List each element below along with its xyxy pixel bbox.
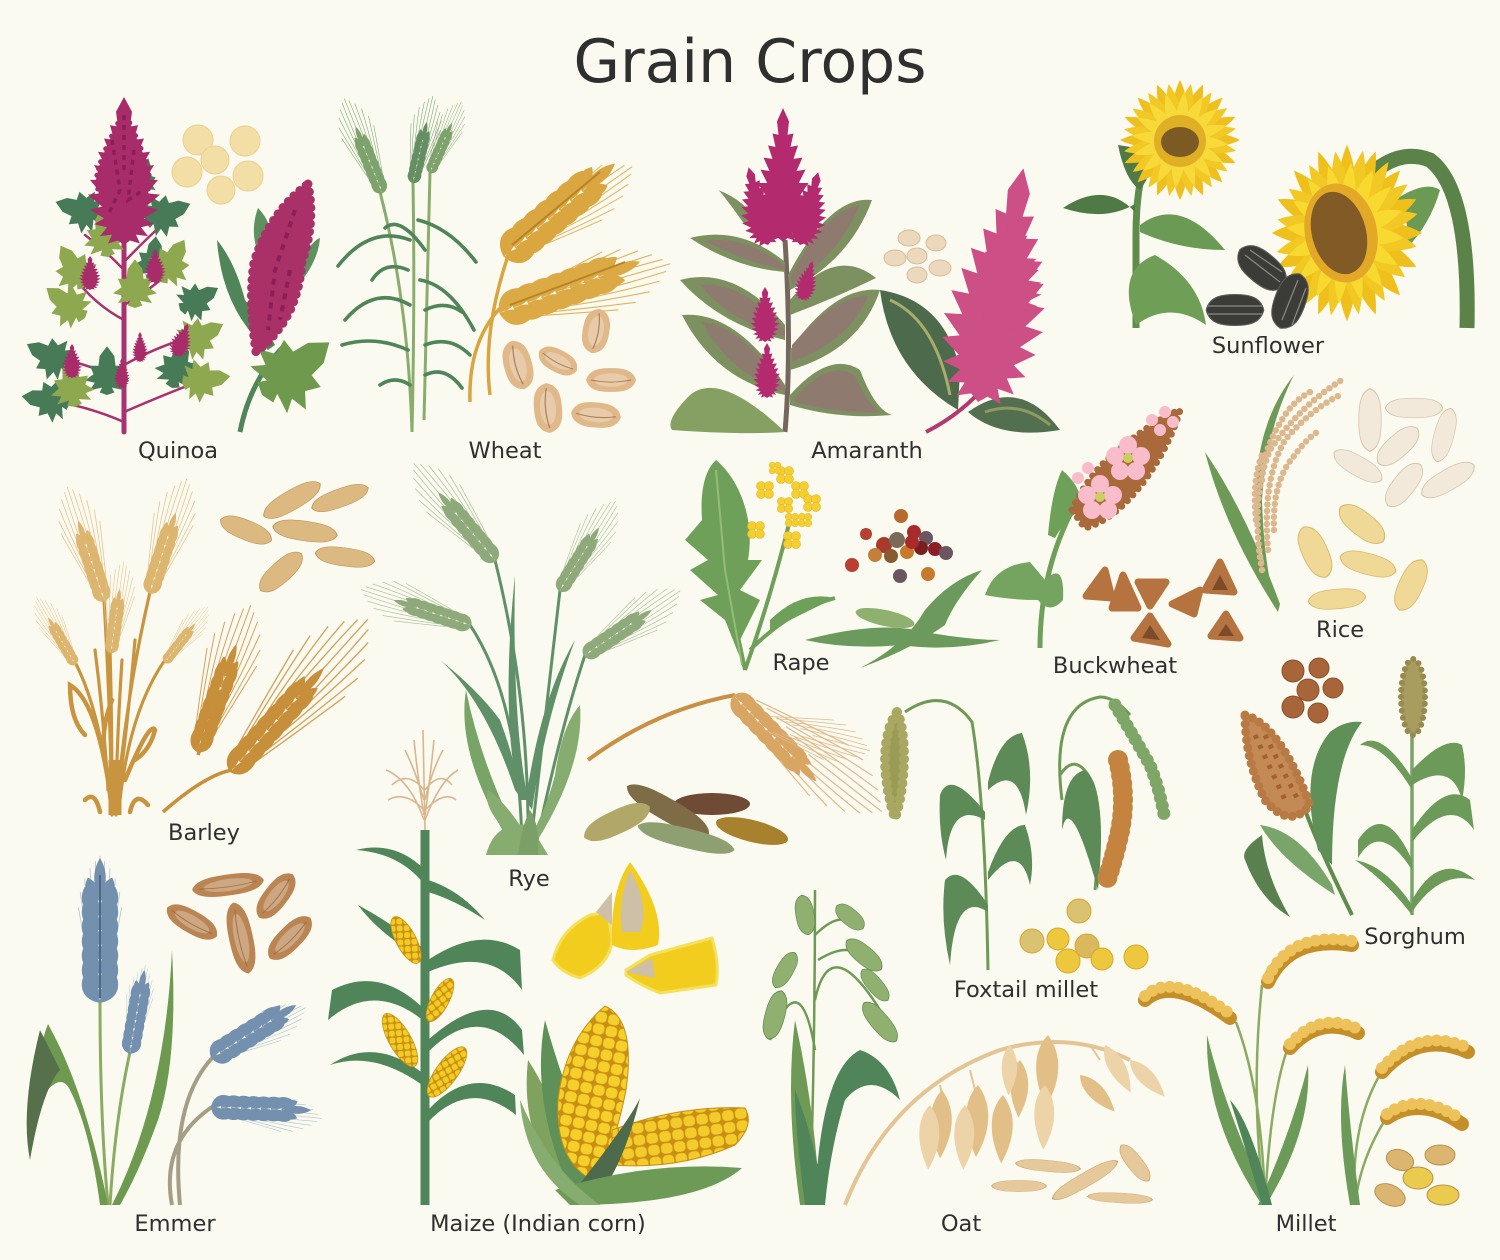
plant: pink amaranth — [880, 159, 1073, 433]
panel: rice — [1205, 375, 1479, 643]
panel: rape — [685, 460, 1000, 676]
plant: rice — [1205, 375, 1345, 612]
seed shading: buckwheat — [1142, 575, 1234, 640]
seeds: rapeseed — [845, 509, 953, 583]
plant: rapeseed — [685, 460, 835, 670]
label: Buckwheat: Buckwheat — [1053, 653, 1177, 679]
seeds: emmer — [162, 867, 319, 976]
plant: buckwheat — [985, 406, 1180, 648]
plant: amaranth with brown leaves — [670, 108, 892, 433]
plant: sunflower upright — [1063, 73, 1247, 328]
ears: barley — [163, 596, 394, 812]
seeds: oat — [992, 1141, 1155, 1205]
seeds: rye — [579, 777, 791, 860]
plant: ripe oat — [845, 1035, 1171, 1205]
panel: barley — [25, 473, 394, 846]
plant: foxtail right — [1060, 697, 1165, 890]
label: Maize (Indian corn): Maize (Indian corn) — [430, 1211, 646, 1237]
panicles: millet — [1145, 939, 1468, 1124]
label: Rye: Rye — [508, 866, 550, 892]
plant: green rye — [355, 450, 691, 855]
panel: wheat — [328, 92, 678, 464]
plant: golden wheat — [470, 145, 678, 402]
label: Quinoa: Quinoa — [138, 438, 218, 464]
plant: sunflower drooping — [1261, 137, 1467, 329]
label: Oat: Oat — [941, 1211, 981, 1237]
seeds: millet — [1371, 1145, 1459, 1211]
panel: rye — [355, 450, 901, 892]
panel: quinoa — [17, 97, 353, 464]
panel: millet — [1145, 939, 1468, 1237]
label: Millet: Millet — [1276, 1211, 1337, 1237]
label: Rice: Rice — [1316, 617, 1364, 643]
plant: quinoa with leaves — [17, 97, 233, 432]
seeds: sorghum — [1282, 658, 1343, 723]
seeds: buckwheat — [1086, 562, 1240, 644]
label: Barley: Barley — [168, 820, 240, 846]
panel: sunflower — [1063, 73, 1467, 359]
label: Wheat: Wheat — [469, 438, 542, 464]
panel: foxtail millet — [885, 697, 1165, 1003]
plant: sorghum tall — [1355, 659, 1475, 915]
plant: sorghum ripe — [1244, 715, 1362, 917]
plant: green wheat — [328, 92, 476, 432]
plant: millet large — [1207, 985, 1308, 1205]
label: Sunflower: Sunflower — [1212, 333, 1325, 359]
plant: emmer green — [27, 856, 173, 1205]
seeds: barley — [217, 475, 376, 598]
label: Rape: Rape — [772, 650, 830, 676]
panel: oat — [759, 890, 1171, 1237]
seeds: foxtail millet — [1020, 899, 1148, 973]
panel: emmer — [27, 856, 323, 1237]
title: Grain Crops — [574, 27, 926, 97]
cob: maize — [520, 1006, 748, 1205]
seeds: maize — [553, 862, 717, 993]
seeds: amaranth — [884, 230, 951, 283]
label: Foxtail millet: Foxtail millet — [954, 977, 1098, 1003]
panel: sorghum — [1244, 658, 1475, 950]
label: Emmer: Emmer — [134, 1211, 216, 1237]
seeds: rice yellow — [1292, 498, 1433, 615]
seeds: wheat — [498, 307, 636, 434]
seeds: sunflower — [1206, 238, 1314, 333]
label: Sorghum: Sorghum — [1364, 924, 1466, 950]
panel: buckwheat — [985, 406, 1240, 679]
plant: foxtail left — [885, 701, 1032, 970]
seeds: rice white — [1329, 389, 1479, 513]
label: Amaranth: Amaranth — [811, 438, 923, 464]
ear: ripe rye — [588, 683, 901, 837]
plant: maize stalk — [328, 730, 524, 1205]
panel: amaranth — [670, 108, 1073, 464]
pods: rapeseed — [805, 570, 1000, 668]
seeds: quinoa — [172, 125, 263, 204]
plant: quinoa flower head — [217, 184, 353, 432]
plant: green oat — [759, 890, 903, 1205]
plant: barley sheaf — [25, 473, 218, 815]
panel: maize — [328, 730, 748, 1237]
plant: millet small — [1341, 1065, 1385, 1205]
plant: emmer ripe — [170, 992, 323, 1205]
